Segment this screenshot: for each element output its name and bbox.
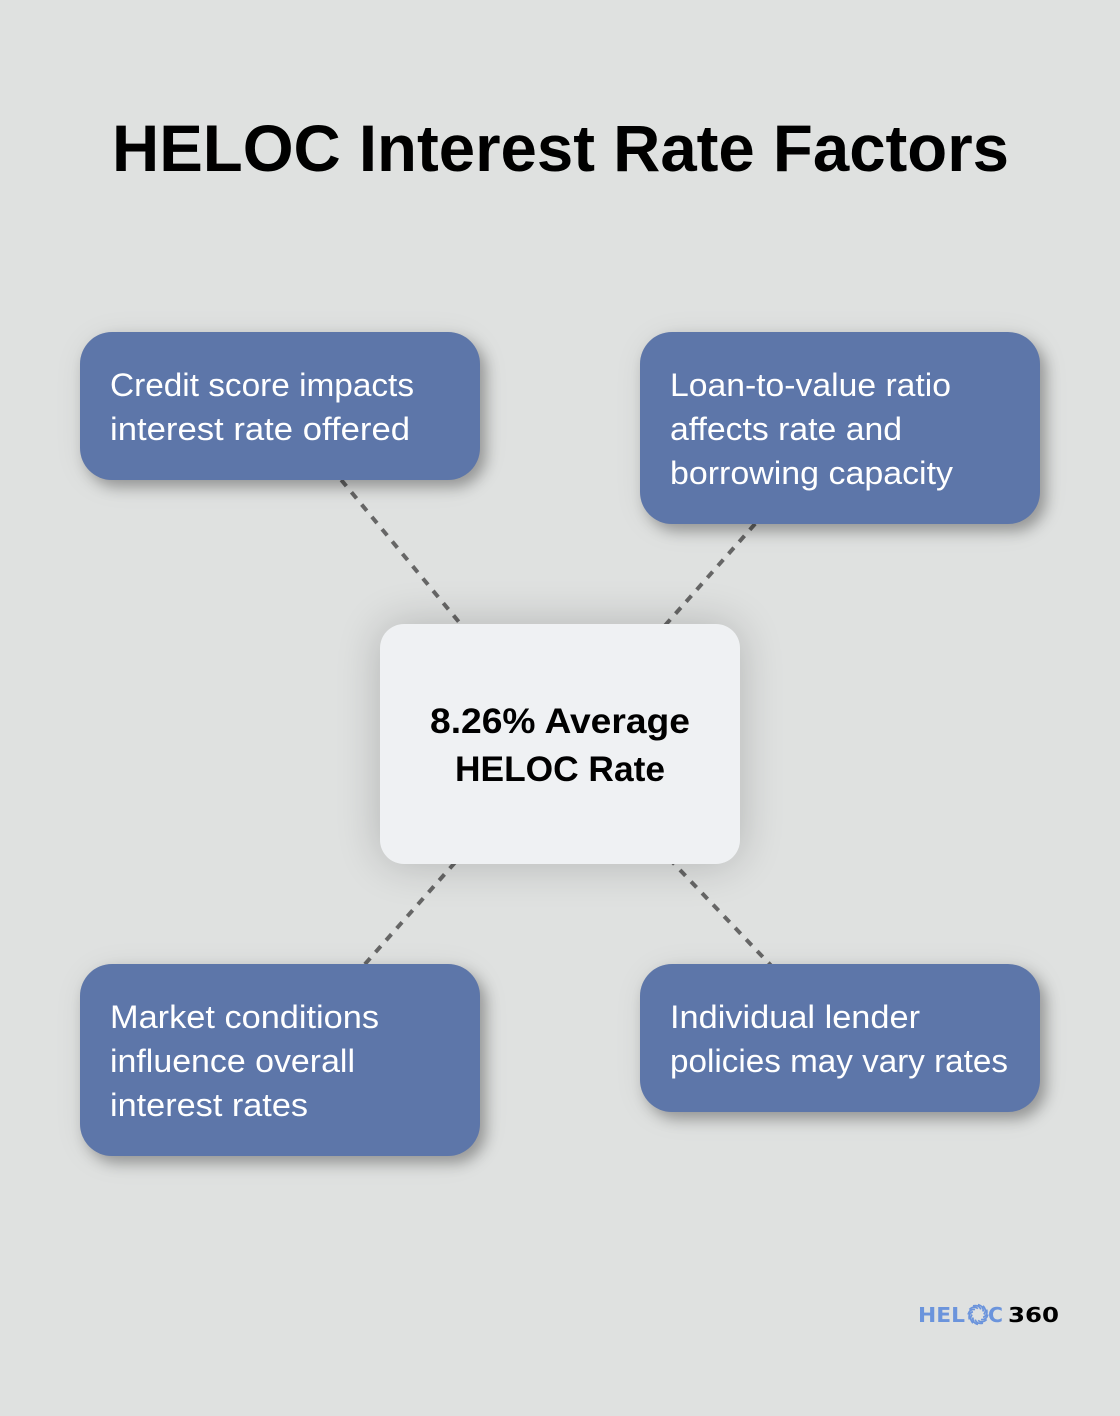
panel: loan-to-value: Loan-to-value ratio xyxy=(670,367,951,403)
panel: market conditions: interest rates xyxy=(110,1087,308,1123)
panel: loan-to-value: borrowing capacity xyxy=(670,455,953,491)
panel: lender policies: policies may vary rates xyxy=(670,1043,1008,1079)
title: HELOC Interest Rate Factors xyxy=(112,111,1009,185)
panel: credit score: Credit score impacts xyxy=(110,367,414,403)
logo: HEL xyxy=(918,1303,965,1327)
panel: central rate: HELOC Rate xyxy=(455,750,665,789)
panel: market conditions xyxy=(80,964,480,1156)
panel: market conditions: influence overall xyxy=(110,1043,355,1079)
panel: loan-to-value xyxy=(640,332,1040,524)
logo: C xyxy=(988,1303,1003,1327)
panel: lender policies xyxy=(640,964,1040,1112)
panel: loan-to-value: affects rate and xyxy=(670,411,902,447)
panel: market conditions: Market conditions xyxy=(110,999,379,1035)
logo: 360 xyxy=(1008,1303,1059,1327)
logo xyxy=(918,1303,1059,1327)
panel: credit score: interest rate offered xyxy=(110,411,410,447)
panel: central rate xyxy=(380,624,740,864)
panel: lender policies: Individual lender xyxy=(670,999,920,1035)
panel: central rate: 8.26% Average xyxy=(430,702,690,741)
panel: credit score xyxy=(80,332,480,480)
